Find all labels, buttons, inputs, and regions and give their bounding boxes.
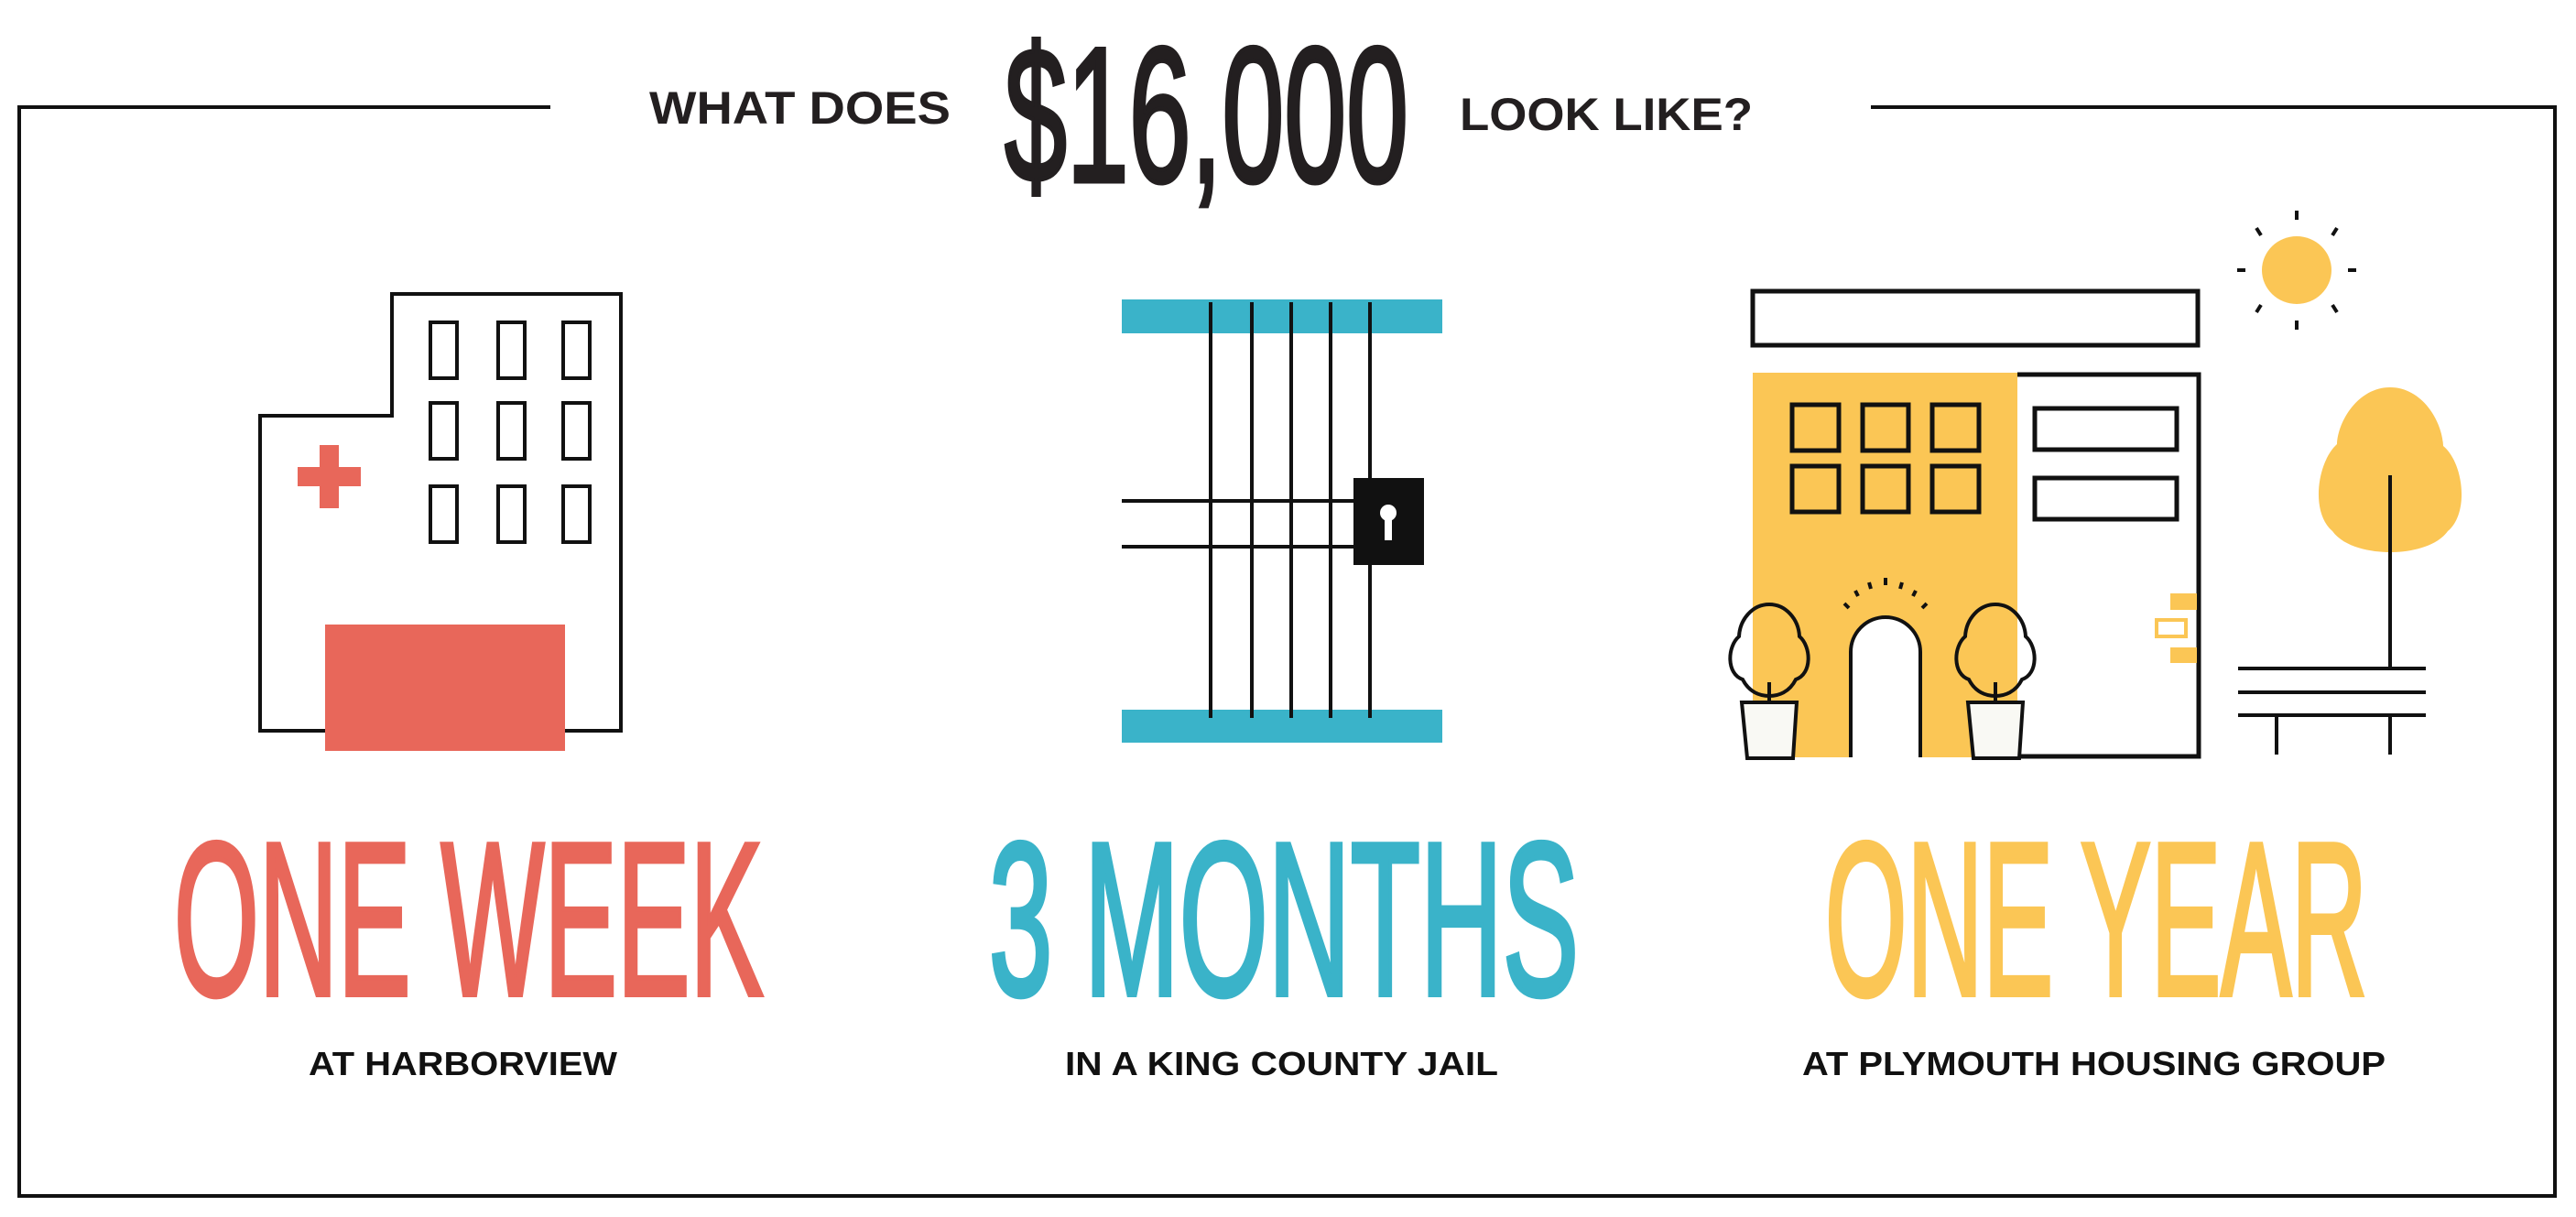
headline: 3 months: 3 MONTHS <box>989 799 1579 1041</box>
title: WHAT DOES <box>649 82 951 134</box>
potted trees <box>1730 604 2035 758</box>
headline: one week: ONE WEEK <box>174 799 763 1041</box>
red block <box>325 625 565 751</box>
icon: hospital <box>260 294 621 751</box>
lock <box>1353 478 1424 565</box>
icon: tree and bench <box>2238 387 2462 755</box>
title <box>649 7 1753 223</box>
windows <box>430 322 590 542</box>
title: LOOK LIKE? <box>1460 89 1753 140</box>
icon: sun <box>2237 211 2356 330</box>
subtitle: plymouth: AT PLYMOUTH HOUSING GROUP <box>1802 1045 2386 1082</box>
icon: housing <box>1730 291 2199 758</box>
icon: jail bars <box>1122 299 1442 743</box>
subtitle: jail: IN A KING COUNTY JAIL <box>1065 1045 1498 1082</box>
title: $16,000 <box>1005 7 1408 223</box>
door <box>1851 617 1920 757</box>
icon: red cross <box>298 445 361 508</box>
subtitle: harborview: AT HARBORVIEW <box>309 1045 617 1082</box>
